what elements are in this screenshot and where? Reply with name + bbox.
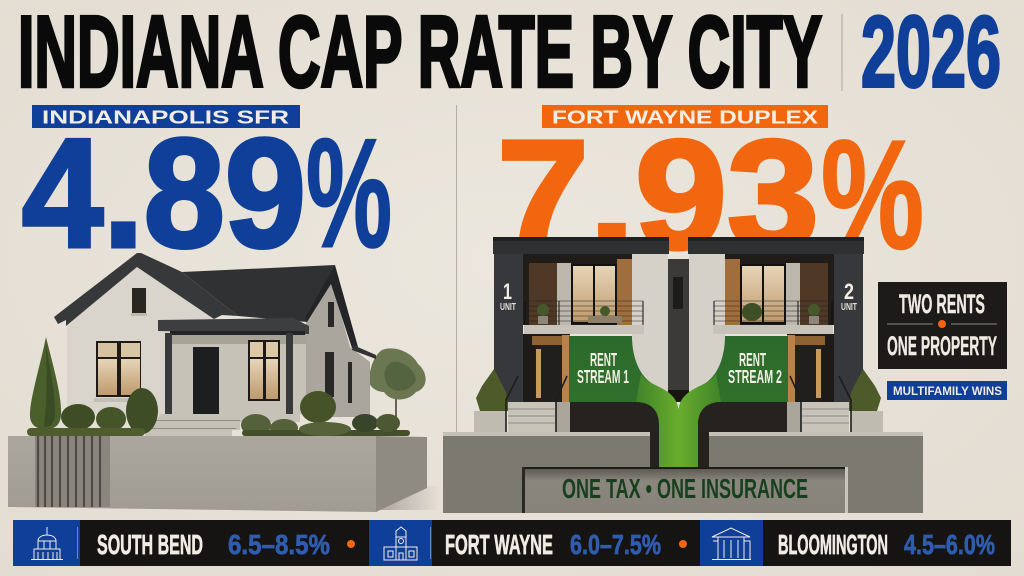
big number: 7.93%: 7.93 — [497, 108, 819, 281]
main roof — [182, 265, 335, 322]
duplex illustration — [443, 237, 923, 513]
city: South Bend — [13, 520, 330, 566]
porch posts — [165, 333, 172, 414]
concrete foundation — [443, 432, 923, 513]
label: rent stream 2 — [728, 350, 782, 387]
city: Bloomington: 4.5–6.0% — [904, 529, 995, 560]
unit 2 building — [688, 237, 864, 432]
badge: multifamily wins: MULTIFAMILY WINS — [893, 384, 1002, 398]
callout: two rents one property — [878, 282, 1007, 369]
big number: 4.89%: 4.89 — [22, 106, 306, 280]
house walls — [67, 267, 213, 414]
icon: cypress tree — [30, 337, 61, 429]
city: South Bend: SOUTH BEND — [97, 529, 203, 560]
label: rent stream 1 — [577, 350, 629, 387]
bushes — [27, 388, 410, 437]
bottom city rate bar — [13, 520, 1011, 566]
steps — [145, 414, 300, 436]
small windows — [131, 288, 352, 403]
big number: 4.89%: % — [306, 106, 392, 280]
city: Bloomington — [700, 520, 995, 566]
city: South Bend: 6.5–8.5% — [228, 529, 330, 560]
label: rent stream 1: RENT — [590, 350, 617, 370]
green rent stream 1 — [569, 336, 678, 467]
city: Bloomington: BLOOMINGTON — [778, 529, 888, 560]
badge: Indianapolis SFR — [32, 105, 300, 128]
label: rent stream 2: STREAM 2 — [728, 367, 782, 387]
icon: clock tower — [384, 527, 417, 560]
label: unit 2: 2 — [844, 279, 854, 304]
badge: Fort Wayne duplex: FORT WAYNE DUPLEX — [552, 108, 818, 128]
badge: multifamily wins — [887, 381, 1007, 400]
icon: right tree — [368, 348, 426, 432]
icon: courthouse — [712, 528, 751, 560]
stairs unit 1 — [474, 369, 570, 432]
stairs unit 2 — [787, 369, 883, 432]
icon: capitol dome — [31, 527, 63, 560]
window left — [94, 341, 141, 402]
city: Fort Wayne: FORT WAYNE — [445, 529, 553, 560]
concrete planter base — [8, 436, 427, 512]
city: Fort Wayne — [369, 520, 661, 566]
single family house illustration — [8, 253, 427, 512]
label: unit 2 — [841, 279, 857, 313]
label: unit 1: UNIT — [500, 302, 516, 313]
porch roof — [158, 318, 309, 334]
label: rent stream 1: STREAM 1 — [577, 367, 629, 387]
green rent stream 2 — [678, 336, 788, 467]
label: unit 1: 1 — [503, 279, 512, 304]
big number: 7.93%: % — [821, 108, 924, 281]
label: unit 1 — [500, 279, 516, 313]
label: one tax one insurance: ONE TAX • ONE INSURANCE — [562, 473, 808, 504]
dot separator — [679, 540, 687, 548]
ground shadow under house — [376, 486, 440, 510]
front door — [193, 347, 219, 414]
label: rent stream 2: RENT — [739, 350, 766, 370]
window porch — [248, 340, 280, 401]
badge: Fort Wayne duplex — [542, 105, 828, 128]
center recess — [666, 259, 690, 402]
label: unit 2: UNIT — [841, 302, 857, 313]
city: Fort Wayne: 6.0–7.5% — [570, 529, 661, 560]
unit 1 building — [493, 237, 669, 432]
badge: Indianapolis SFR: INDIANAPOLIS SFR — [42, 108, 289, 128]
dot separator — [347, 540, 355, 548]
